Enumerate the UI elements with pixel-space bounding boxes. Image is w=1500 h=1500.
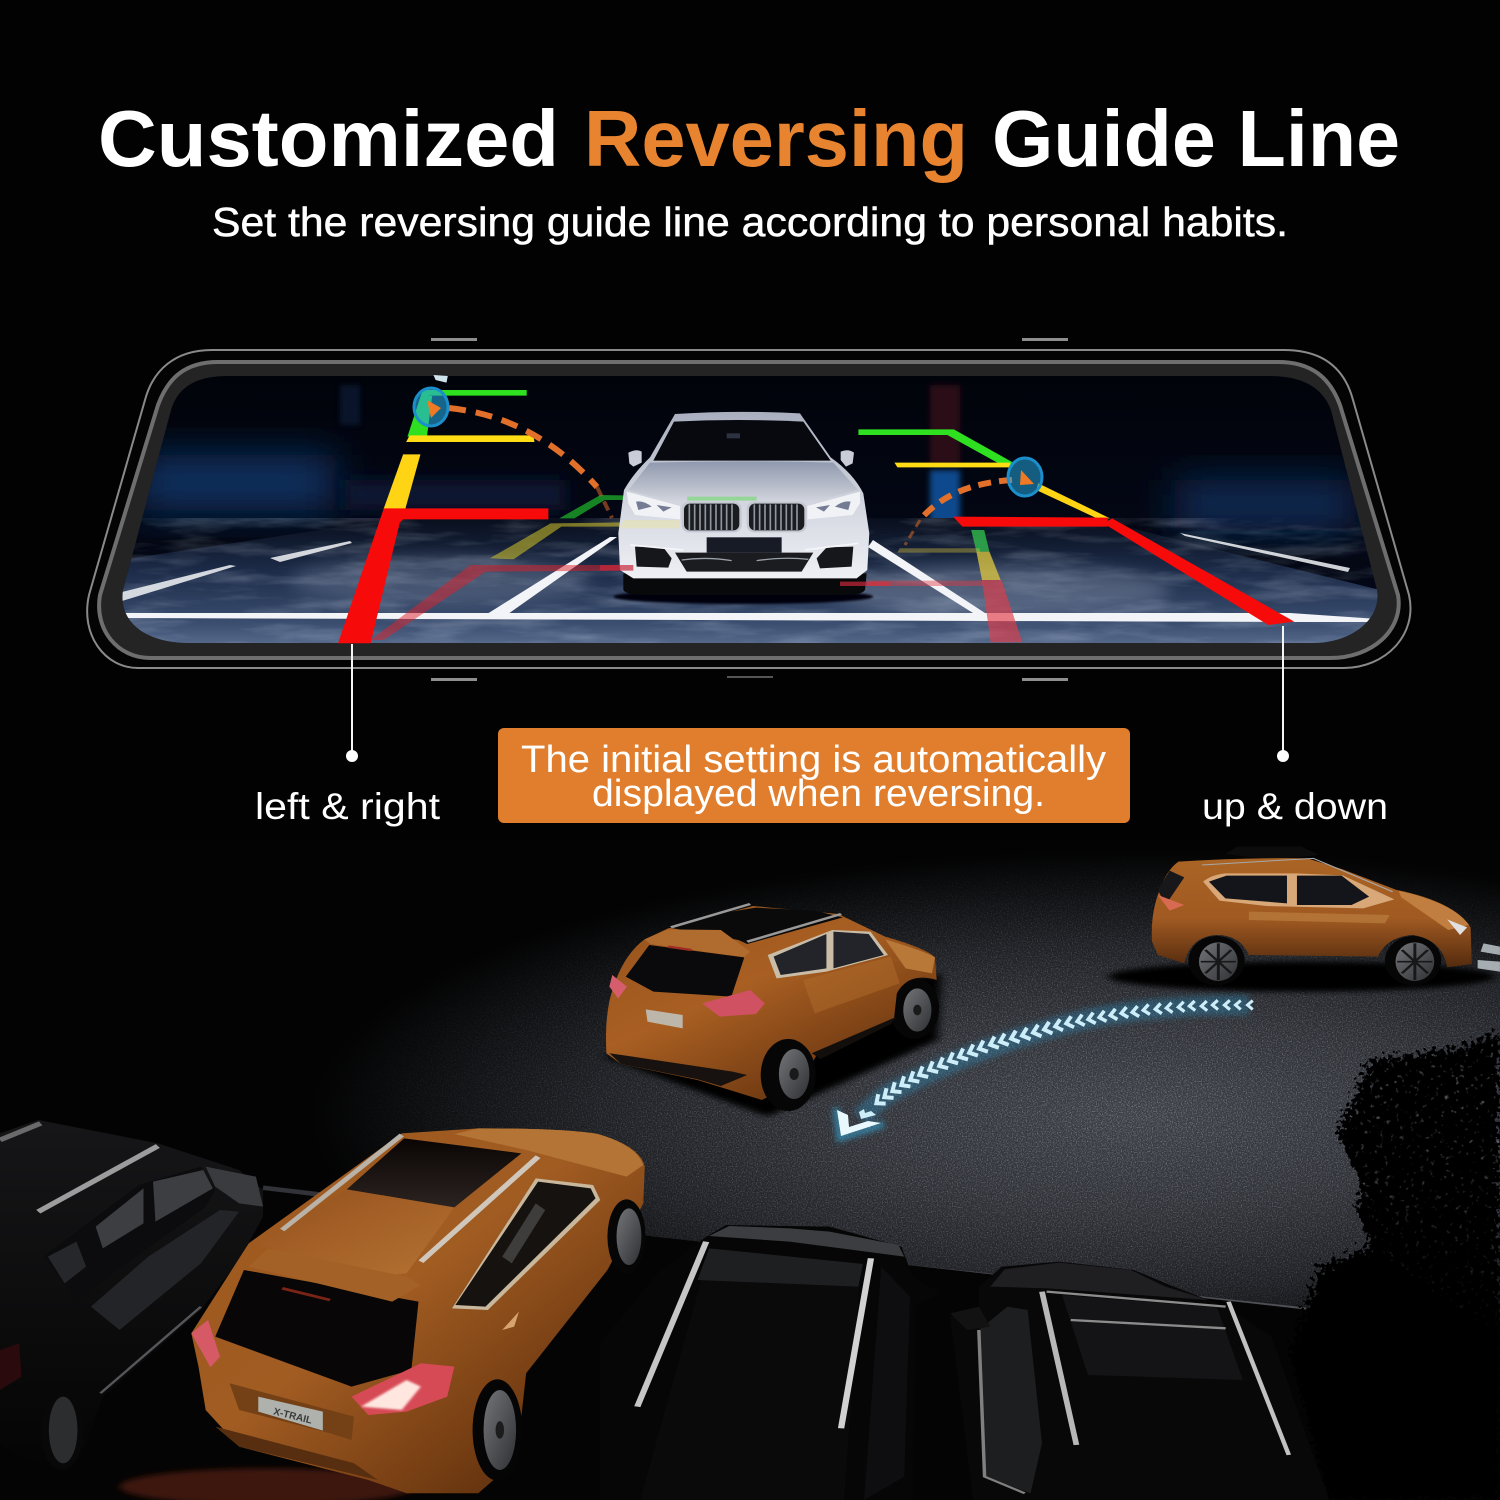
car: copper SUV, side view upper right bbox=[1108, 847, 1500, 992]
dark foreground under parked cars bbox=[0, 1190, 1500, 1500]
callout: initial setting: The initial setting is automatically bbox=[521, 739, 1106, 781]
floor lane markings bbox=[122, 533, 1378, 622]
projected chevron arrow trail bbox=[836, 1000, 1253, 1138]
car: copper SUV reversing into bay bbox=[120, 1128, 646, 1500]
callout: initial setting: displayed when reversing. bbox=[592, 773, 1045, 815]
BMW grille bbox=[682, 502, 807, 532]
bush silhouette bbox=[1296, 1028, 1500, 1320]
callout: initial setting bbox=[498, 728, 1130, 823]
subtitle: Set the reversing guide line according to personal habits. bbox=[212, 199, 1288, 245]
parking bay lines bbox=[263, 1188, 1306, 1500]
title: Guide Line bbox=[992, 94, 1400, 183]
white BMW car bbox=[600, 412, 890, 604]
callout leader: up and down bbox=[1277, 626, 1289, 762]
guide lines, right side bbox=[858, 429, 1294, 642]
scene: night car park bbox=[0, 840, 1500, 1500]
mirror screen bbox=[100, 370, 1400, 650]
title: Reversing bbox=[584, 94, 968, 183]
mirror bezel bbox=[99, 362, 1399, 658]
adjustment arrow, right bbox=[905, 457, 1043, 545]
guide lines, left side bbox=[338, 375, 696, 643]
title: Customized bbox=[98, 94, 559, 183]
mirror device bbox=[87, 338, 1410, 681]
title bbox=[98, 94, 1400, 183]
label: left & right: left & right bbox=[255, 786, 441, 827]
label: up & down: up & down bbox=[1202, 786, 1388, 827]
mirror tabs bbox=[431, 338, 1068, 681]
translucent guide lines over car bbox=[687, 497, 757, 501]
garage floor bbox=[100, 518, 1380, 650]
car: copper SUV, rear three-quarter centre bbox=[603, 904, 941, 1117]
adjustment arrow, left bbox=[413, 387, 612, 518]
garage wall glow bbox=[135, 385, 1355, 530]
asphalt ground bbox=[338, 861, 1500, 1320]
car: black SUV parked centre bbox=[600, 1225, 942, 1500]
rear plate text: X-TRAIL bbox=[272, 1406, 313, 1427]
car: black SUV parked left bbox=[0, 1120, 263, 1473]
mirror outer frame bbox=[87, 350, 1410, 668]
callout leader: left and right bbox=[346, 644, 358, 762]
car: black SUV parked right bbox=[950, 1262, 1329, 1500]
